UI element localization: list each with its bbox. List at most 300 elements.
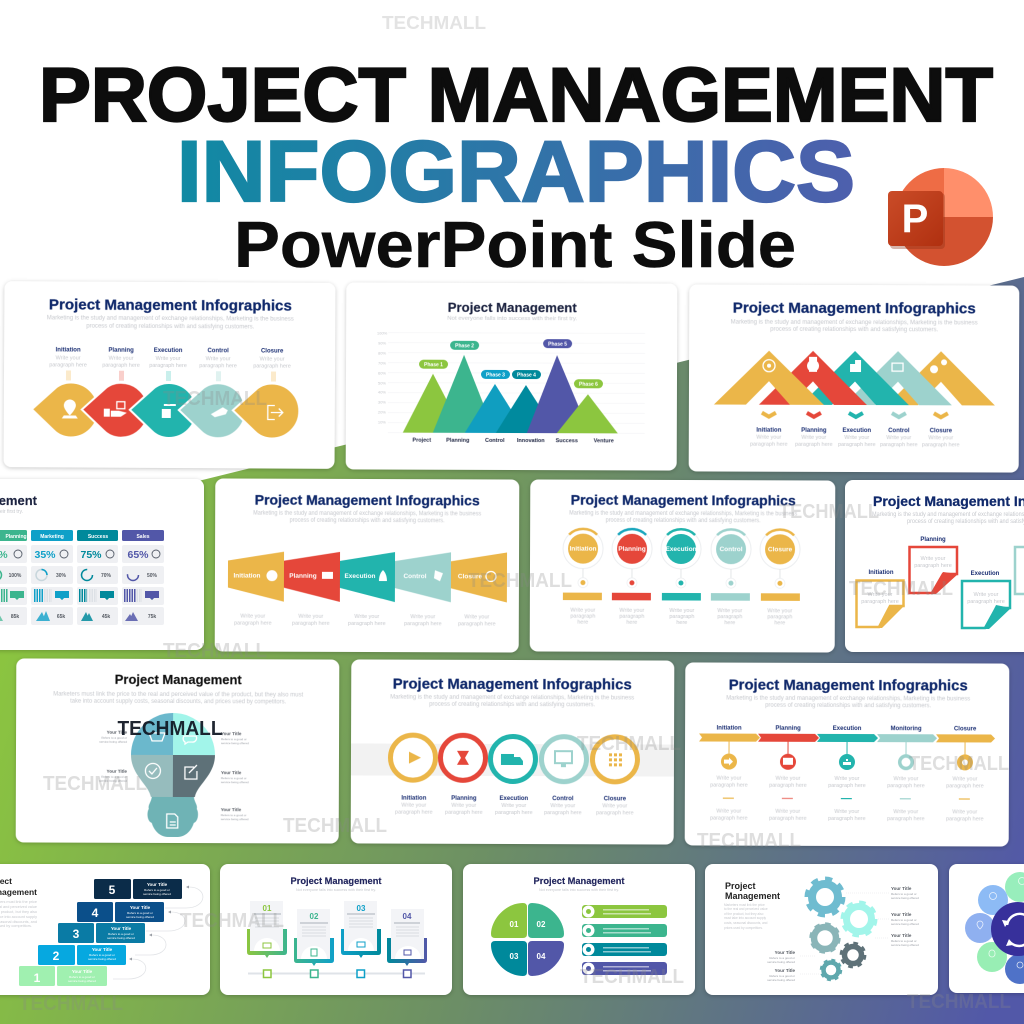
dashes <box>723 798 970 800</box>
column headers <box>0 530 164 541</box>
column headers: Sales <box>136 534 150 540</box>
step labels: Closure <box>604 796 627 802</box>
watermarks: TECHMALL <box>907 990 1011 1013</box>
note: initiation: Write your <box>868 592 893 598</box>
paragraphs <box>710 776 984 822</box>
step 5: Your Title <box>147 882 168 887</box>
paragraphs: paragraph here <box>828 783 866 789</box>
gear captions: Your Title <box>891 912 912 917</box>
gear captions: Refers to a good or <box>769 974 795 978</box>
step paragraphs: paragraph here <box>292 621 330 627</box>
y axis labels: 30% <box>378 400 386 405</box>
slide description: take into account supply costs, seasonal discounts, and prices used by competitors. <box>70 699 286 705</box>
slide description: Marketing is the study and management of exchange relationships, Marketing is the business <box>390 695 634 701</box>
slide description <box>731 320 978 333</box>
right captions: Refers to a good or <box>221 813 246 817</box>
phase tags: Phase 5 <box>548 342 567 348</box>
phase tags: Phase 2 <box>455 343 474 349</box>
peak chevrons <box>714 351 995 405</box>
panel: overlapping peaks slide <box>689 284 1019 473</box>
column headers: Planning <box>5 534 27 540</box>
right captions: Refers to a good or <box>221 737 247 741</box>
step text and icons: Control <box>403 573 427 580</box>
category labels: Control <box>485 438 505 444</box>
left captions <box>99 730 128 783</box>
panel: mountain chart slide <box>346 282 677 471</box>
gear 2 <box>842 902 876 936</box>
step labels: Write your <box>501 803 526 809</box>
phase tags: Phase 4 <box>517 373 536 379</box>
step labels: Write your <box>156 356 181 362</box>
y axis labels: 70% <box>378 361 386 366</box>
milestone circles <box>563 529 800 569</box>
slide description: Marketing is the study and management of exchange relationships, Marketing is the business <box>731 320 978 326</box>
mini mountains row: 65k <box>57 614 65 620</box>
left captions: Your Title <box>107 730 128 735</box>
milestone circles: Control <box>719 546 743 553</box>
left captions: service being offered <box>99 740 127 744</box>
watermarks: TECHMALL <box>43 772 147 795</box>
leaf icons <box>62 399 283 420</box>
step 2: Your Title <box>92 947 113 952</box>
step labels: Control <box>888 428 910 434</box>
gear captions: service being offered <box>891 922 919 926</box>
note: execution: Write your <box>974 592 999 598</box>
gear captions: Refers to a good or <box>891 939 917 943</box>
category labels <box>412 438 614 444</box>
paragraphs: Write your <box>619 608 644 614</box>
number rules <box>254 914 420 923</box>
step labels: Closure <box>261 348 284 355</box>
heading: project management: PROJECT MANAGEMENT <box>39 53 993 138</box>
y axis labels <box>377 331 388 425</box>
numbers: 03 <box>357 904 366 913</box>
note: initiation: Initiation <box>868 570 894 576</box>
step 1: service being offered <box>68 979 96 983</box>
percentage row: 75% <box>80 549 102 561</box>
timeline labels: Planning <box>775 726 801 732</box>
slide description: Marketing is the study and management of exchange relationships, Marketing is the business <box>569 511 797 517</box>
light bulb <box>131 713 215 837</box>
note: planning: Planning <box>920 537 946 543</box>
step labels: Write your <box>109 356 134 362</box>
step labels: Write your <box>844 435 869 441</box>
gear captions: service being offered <box>891 896 919 900</box>
gear 1 <box>806 878 844 916</box>
numbers: 01 <box>263 904 272 913</box>
step paragraphs: paragraph here <box>404 621 442 627</box>
slide description: Not everyone falls into success with their first try. <box>447 316 578 322</box>
panel: funnel arrows slide <box>215 478 519 653</box>
category labels: Planning <box>446 438 469 444</box>
mini mountains row <box>0 611 156 621</box>
step 3: service being offered <box>107 936 135 940</box>
note: execution <box>962 571 1011 629</box>
gear captions: service being offered <box>767 960 795 964</box>
y axis labels: 10% <box>378 420 386 425</box>
slide paragraph: Marketers must link the price <box>724 903 765 907</box>
slide description: process of creating relationships with and satisfying customers. <box>86 324 255 330</box>
peak icons <box>763 357 947 373</box>
gear captions: Your Title <box>891 933 912 938</box>
paragraphs: paragraph <box>570 614 595 620</box>
paragraphs: paragraph here <box>828 816 866 822</box>
step paragraphs: Write your <box>354 614 379 620</box>
step labels: Initiation <box>401 796 427 802</box>
step labels: Write your <box>260 356 285 363</box>
leaf shapes <box>32 382 299 439</box>
gear 3 <box>811 924 839 952</box>
category labels: Innovation <box>517 438 545 444</box>
paper cards <box>250 901 424 959</box>
step labels: Write your <box>801 435 826 441</box>
progress ring row: 50% <box>147 573 158 579</box>
left captions: service being offered <box>99 779 127 783</box>
watermarks: TECHMALL <box>118 717 222 740</box>
petals: 01 <box>510 920 519 929</box>
numbers: 02 <box>310 912 319 921</box>
slide description: process of creating relationships with and satisfying customers. <box>770 327 939 333</box>
panel: staircase slide <box>0 864 210 995</box>
y axis labels: 80% <box>378 351 387 356</box>
step labels: Write your <box>756 435 781 441</box>
step labels: paragraph here <box>922 442 960 448</box>
column headers: Success <box>88 534 108 540</box>
grey band <box>351 743 674 777</box>
step paragraphs: paragraph here <box>234 621 272 627</box>
paragraphs: paragraph here <box>710 816 748 822</box>
paragraphs: Write your <box>570 608 595 614</box>
step 2: service being offered <box>88 957 116 961</box>
step labels: Write your <box>206 356 231 362</box>
paragraphs: Write your <box>669 608 694 614</box>
panel: petal chart slide <box>463 864 695 995</box>
step 3 <box>58 923 145 943</box>
paragraphs: Write your <box>717 608 742 614</box>
slide description <box>253 511 481 524</box>
note: planning <box>910 537 958 594</box>
gear captions: Your Title <box>775 968 795 973</box>
step labels: paragraph here <box>199 363 237 369</box>
left captions: Refers to a good or <box>101 736 127 740</box>
right captions <box>221 731 249 821</box>
step text and icons <box>233 570 496 582</box>
percentage row: 35% <box>34 549 56 561</box>
colour bars <box>563 593 800 601</box>
progress ring row: 70% <box>101 573 112 579</box>
slide description: Marketing is the study and management of exchange relationships, Marketing is the business <box>726 696 970 702</box>
watermarks: TECHMALL <box>283 814 387 837</box>
paragraphs: here <box>676 620 687 626</box>
timeline labels: Closure <box>954 726 977 732</box>
step labels: Write your <box>928 435 953 441</box>
step 5: Refers to a good or <box>144 888 170 892</box>
percentage row <box>0 549 160 561</box>
category labels: Venture <box>594 438 614 444</box>
step 5: 5 <box>109 883 116 897</box>
slide paragraph: must take into account supply <box>724 916 766 920</box>
milestone circles: Closure <box>768 546 793 553</box>
panel: ring steps slide <box>351 659 674 845</box>
note: planning: Write your <box>921 556 946 562</box>
timeline labels <box>717 726 977 732</box>
y axis labels: 50% <box>378 381 386 386</box>
step labels: Write your <box>56 355 81 362</box>
category labels: Project <box>412 438 431 444</box>
satellites <box>965 872 1024 984</box>
step labels: paragraph here <box>544 810 582 816</box>
step labels: paragraph here <box>838 442 876 448</box>
left captions: Refers to a good or <box>101 775 127 779</box>
timeline labels: Execution <box>833 726 862 732</box>
step 1 <box>19 966 107 986</box>
watermarks: TECHMALL <box>580 965 684 988</box>
slide title: Management <box>725 891 780 901</box>
paragraphs: here <box>774 620 785 626</box>
step paragraphs <box>234 614 496 627</box>
stems and icons <box>721 742 973 770</box>
slide title: Project Management Infographics <box>49 296 292 315</box>
step text and icons: Execution <box>344 573 376 580</box>
milestone circles: Execution <box>666 546 697 553</box>
paragraphs: Write your <box>952 776 978 782</box>
category labels: Success <box>556 438 578 444</box>
paragraphs: here <box>577 620 588 626</box>
slide title: Project Management Infographics <box>393 676 632 693</box>
step paragraphs: Write your <box>464 614 489 620</box>
slide paragraph: prices used by competitors. <box>724 926 763 930</box>
stems and dots <box>578 569 785 588</box>
paragraphs: Write your <box>716 776 742 782</box>
slide paragraph: of the product, but they also <box>724 912 764 916</box>
slide title <box>725 881 780 901</box>
timeline labels: Monitoring <box>891 726 922 732</box>
panel: gears slide <box>705 864 938 995</box>
right captions: Your Title <box>221 770 242 775</box>
gear captions: Refers to a good or <box>769 956 795 960</box>
numbers <box>263 904 412 921</box>
curved arrows <box>113 886 203 979</box>
step labels: Write your <box>451 803 476 809</box>
bar stripes row <box>0 591 159 600</box>
paragraphs: paragraph <box>767 614 792 620</box>
step 2: Refers to a good or <box>89 953 115 957</box>
step labels: paragraph here <box>395 810 433 816</box>
step labels: Execution <box>154 348 183 354</box>
panel: numbered cards slide <box>220 864 452 995</box>
paragraphs: paragraph here <box>769 816 807 822</box>
step paragraphs: paragraph here <box>348 621 386 627</box>
left captions: Your Title <box>107 769 127 774</box>
step 1: 1 <box>34 971 41 985</box>
bars <box>582 905 667 975</box>
paragraphs: paragraph here <box>887 816 925 822</box>
icon: powerpoint logo <box>888 168 993 266</box>
petals: 04 <box>537 952 546 961</box>
phase tags: Phase 6 <box>579 382 598 388</box>
paragraphs: here <box>626 620 637 626</box>
step labels: Control <box>552 796 574 802</box>
y axis labels: 40% <box>378 390 386 395</box>
domes and icons <box>254 938 421 959</box>
gear captions: Refers to a good or <box>891 892 917 896</box>
petals: 03 <box>510 952 519 961</box>
note: execution: Execution <box>971 571 1000 577</box>
y axis labels: 60% <box>378 371 386 376</box>
step labels: paragraph here <box>495 810 533 816</box>
gear captions: Refers to a good or <box>891 918 917 922</box>
step labels: paragraph here <box>445 810 483 816</box>
paragraphs: paragraph here <box>710 783 748 789</box>
step labels: Execution <box>499 796 529 802</box>
slide description: Marketers must link the price to the real and perceived value of the product, but they also must <box>53 692 304 698</box>
step labels: Initiation <box>56 347 81 354</box>
progress ring row: 30% <box>56 573 67 579</box>
milestone circles: Planning <box>618 546 646 553</box>
step labels: Execution <box>842 428 871 434</box>
slide description <box>47 315 294 331</box>
slide description: process of creating relationships with and satisfying customers. <box>765 703 932 709</box>
step labels: Initiation <box>756 428 782 434</box>
step 4: Your Title <box>130 905 151 910</box>
slide description <box>726 696 970 709</box>
numbers: 04 <box>403 912 412 921</box>
step 4: 4 <box>92 906 99 920</box>
slide description <box>569 511 797 524</box>
gear 5 <box>821 960 841 980</box>
step labels <box>49 347 291 370</box>
percentage row: 65% <box>127 549 149 561</box>
slide title: Project Management <box>290 876 382 886</box>
step labels: Planning <box>108 348 134 354</box>
paragraphs: paragraph <box>619 614 644 620</box>
y axis labels: 20% <box>378 410 386 415</box>
step labels: Planning <box>451 796 477 802</box>
step text and icons: Planning <box>289 573 317 580</box>
step labels: paragraph here <box>102 363 140 369</box>
step labels <box>395 796 634 816</box>
watermarks: TECHMALL <box>382 13 486 33</box>
step 4 <box>77 902 164 922</box>
paper text <box>255 918 419 936</box>
panel: circle milestones slide <box>530 479 835 653</box>
watermarks: TECHMALL <box>577 732 681 755</box>
trapezoid steps <box>228 552 507 602</box>
slide title: Project Management Infographics <box>733 300 976 317</box>
gear captions: service being offered <box>891 943 919 947</box>
slide title <box>0 876 37 897</box>
phase tags: Phase 3 <box>486 372 505 378</box>
slide paragraph <box>724 903 768 930</box>
heading: powerpoint slide: PowerPoint Slide <box>234 208 796 281</box>
step labels: Closure <box>930 428 953 434</box>
slide title: Project Management <box>534 876 624 886</box>
central hub <box>991 902 1024 956</box>
paragraphs: Write your <box>834 776 860 782</box>
right captions: Your Title <box>221 731 242 736</box>
step 5 <box>94 879 182 899</box>
step 4: service being offered <box>126 915 154 919</box>
step paragraphs: Write your <box>410 614 435 620</box>
step 1: Refers to a good or <box>69 975 95 979</box>
step labels: Write your <box>886 435 911 441</box>
right captions: Your Title <box>221 807 242 812</box>
heading: infographics: INFOGRAPHICS <box>177 124 855 220</box>
right captions: Refers to a good or <box>221 776 247 780</box>
mini mountains row: 45k <box>102 614 110 620</box>
step labels: Planning <box>801 428 827 434</box>
step labels: Control <box>207 348 229 354</box>
slide description: Marketing is the study and management of exchange relationships, Marketing is the business <box>47 315 294 323</box>
slide paragraph: to the real and perceived value <box>724 907 768 911</box>
slide title: Project Management <box>115 672 242 687</box>
step labels: Write your <box>602 803 627 809</box>
step paragraphs: paragraph here <box>458 621 496 627</box>
slide title: Project <box>725 881 756 891</box>
step labels: paragraph here <box>750 442 788 448</box>
paragraphs: Write your <box>716 809 741 815</box>
step 3: Refers to a good or <box>108 932 134 936</box>
mini mountains row: 85k <box>11 614 19 620</box>
slide paragraph: costs, seasonal discounts, and <box>724 921 768 925</box>
table cells <box>0 545 164 625</box>
step 5: service being offered <box>143 892 171 896</box>
step paragraphs: Write your <box>240 614 265 620</box>
slide title: Project Management Infographics <box>255 492 480 508</box>
milestone circles: Initiation <box>569 546 597 553</box>
title <box>39 53 993 281</box>
right captions: service being offered <box>221 780 249 784</box>
slide description: process of creating relationships with and satisfying customers. <box>429 702 595 708</box>
paragraphs: Write your <box>834 809 859 815</box>
step paragraphs: Write your <box>298 614 323 620</box>
watermarks: TECHMALL <box>19 992 123 1015</box>
panel: leaf process slide <box>4 281 335 469</box>
progress ring row <box>0 570 158 580</box>
timeline labels: Initiation <box>717 726 742 732</box>
step 4: Refers to a good or <box>127 911 153 915</box>
panel: arrow timeline slide <box>685 662 1009 847</box>
slide description <box>872 512 1024 525</box>
step labels <box>750 428 960 448</box>
gear captions <box>767 886 919 982</box>
gradient background <box>0 277 1024 1024</box>
gear 4 <box>841 943 865 967</box>
petals: 02 <box>537 920 546 929</box>
panel: sticky notes slide <box>845 480 1024 652</box>
note: execution: paragraph here <box>967 599 1005 605</box>
slide title: Project Management Infographics <box>729 677 968 694</box>
step labels: Write your <box>550 803 575 809</box>
slide paragraph <box>0 900 37 928</box>
phase tags: Phase 1 <box>424 362 443 368</box>
mini mountains row: 75k <box>148 614 156 620</box>
progress ring row: 100% <box>9 573 22 579</box>
slide description <box>390 695 634 708</box>
watermarks: TECHMALL <box>849 577 953 600</box>
slide description <box>53 692 304 705</box>
y axis labels: 90% <box>378 341 387 346</box>
step text and icons: Initiation <box>233 573 261 580</box>
step labels: paragraph here <box>596 810 634 816</box>
watermarks: TECHMALL <box>779 500 879 523</box>
small chevrons <box>762 413 948 417</box>
paragraphs: Write your <box>893 809 918 815</box>
right captions: service being offered <box>221 817 249 821</box>
paragraphs: paragraph here <box>769 783 807 789</box>
step labels: paragraph here <box>880 442 918 448</box>
watermarks: TECHMALL <box>697 829 801 852</box>
